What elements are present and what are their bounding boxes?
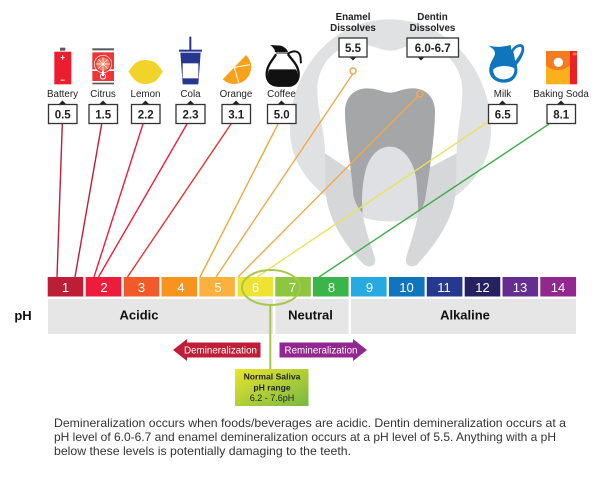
value box: orange 3.1: [222, 100, 250, 124]
pH scale bar: 1: [62, 280, 69, 295]
label: Citrus: Citrus: [90, 89, 116, 100]
value box: enamel 5.5: 5.5: [345, 43, 362, 55]
value box: citrus 1.5: [89, 100, 118, 124]
arrow: demineralization: Demineralization: [184, 346, 257, 356]
pH scale bar: 13: [513, 280, 527, 295]
label: Dentin Dissolves: Dentin: [417, 12, 448, 23]
description paragraph: Demineralization occurs when foods/beverages are acidic. Dentin demineralization occurs at a: [54, 416, 566, 430]
pH scale bar: 4: [177, 280, 185, 295]
value box: lemon 2.2: 2.2: [138, 109, 154, 121]
value box: battery 0.5: [48, 100, 77, 124]
label: Orange: Orange: [220, 89, 253, 100]
arrow: remineralization: [280, 339, 367, 361]
value box: cola 2.3: 2.3: [182, 109, 198, 121]
pH scale bar: 10: [399, 280, 414, 295]
value box: battery 0.5: 0.5: [55, 109, 71, 121]
tooth illustration: [290, 19, 491, 266]
value box: baking soda 8.1: [547, 100, 576, 124]
label: Enamel Dissolves: Enamel: [336, 12, 370, 23]
pH scale bar: 6: [252, 280, 259, 295]
pH scale bar: 9: [366, 280, 373, 295]
value box: dentin 6.0-6.7: [407, 38, 458, 60]
value box: milk 6.5: 6.5: [495, 109, 511, 121]
icon: milk jug: [488, 44, 524, 83]
label: Enamel Dissolves: Dissolves: [330, 23, 376, 34]
value box: citrus 1.5: 1.5: [95, 109, 112, 121]
value box: lemon 2.2: [132, 100, 160, 124]
icon: baking soda box: [546, 51, 577, 84]
callout: normal saliva pH range: [235, 369, 308, 406]
pH scale bar: 12: [475, 280, 490, 295]
neutral band: [276, 299, 348, 334]
arrow: demineralization: [173, 339, 260, 361]
value box: milk 6.5: [488, 100, 517, 124]
alkaline band: [351, 299, 576, 334]
description paragraph: [54, 416, 566, 458]
pH scale bar: 5: [214, 280, 222, 295]
value box: coffee 5.0: [268, 100, 296, 124]
icon: cola cup: [179, 37, 202, 84]
alkaline band: Alkaline: [440, 308, 490, 322]
label: Milk: Milk: [494, 89, 511, 100]
pH scale bar: 11: [437, 280, 451, 295]
callout: normal saliva pH range: 6.2 - 7.6pH: [250, 393, 294, 403]
icon: battery: [54, 48, 71, 84]
connector lines: [57, 68, 549, 277]
acidic band: Acidic: [119, 308, 159, 322]
pH scale bar: 8: [328, 280, 335, 295]
label: Dentin Dissolves: Dissolves: [410, 23, 456, 34]
value box: orange 3.1: 3.1: [228, 109, 245, 121]
neutral band: Neutral: [288, 308, 333, 322]
value box: cola 2.3: [176, 100, 205, 124]
pH axis label: pH: [14, 308, 32, 323]
icon: citrus can: [92, 48, 114, 84]
arrow: remineralization: Remineralization: [285, 346, 357, 356]
value box: baking soda 8.1: 8.1: [553, 109, 570, 121]
pH scale bar: 2: [100, 280, 108, 295]
label: Cola: Cola: [180, 89, 201, 100]
icon: coffee pot: [267, 45, 301, 86]
description paragraph: pH level of 6.0-6.7 and enamel demineralization occurs at a pH level of 5.5. Anything with a pH: [54, 430, 556, 444]
value box: coffee 5.0: 5.0: [274, 109, 290, 121]
icon: orange slices: [223, 55, 251, 84]
pH scale bar: 7: [289, 280, 296, 295]
callout: normal saliva pH range: Normal Saliva: [244, 372, 301, 382]
label: Baking Soda: Baking Soda: [533, 89, 589, 100]
icon: lemon: [128, 60, 163, 84]
label: Coffee: Coffee: [267, 89, 296, 100]
pH scale bar: [48, 277, 576, 296]
label: Battery: Battery: [47, 89, 78, 100]
acidic band: [48, 299, 273, 334]
pH scale bar: 3: [138, 280, 145, 295]
label: Lemon: Lemon: [131, 89, 160, 100]
value box: enamel 5.5: [339, 38, 367, 60]
callout: normal saliva pH range: pH range: [253, 382, 291, 392]
saliva range ellipse and stem: [242, 270, 300, 370]
description paragraph: below these levels is potentially damaging to the teeth.: [54, 444, 351, 458]
pH scale bar: 14: [551, 280, 565, 295]
value box: dentin 6.0-6.7: 6.0-6.7: [415, 43, 451, 55]
